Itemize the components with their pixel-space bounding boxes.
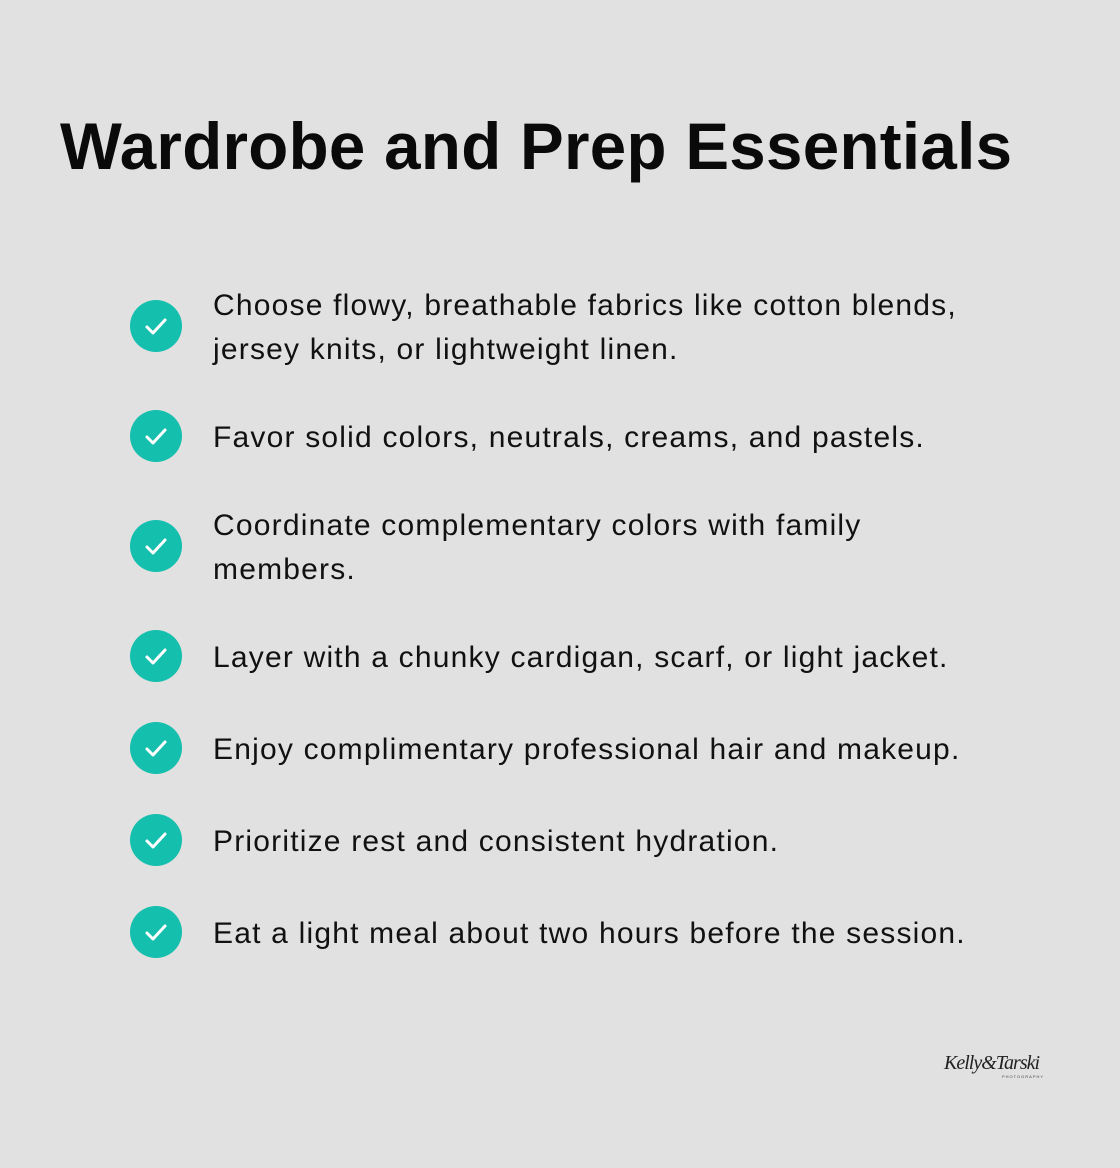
item 2 [130, 410, 925, 462]
item 3 [130, 509, 862, 586]
text: Layer with a chunky cardigan, scarf, or light jacket. [213, 641, 949, 674]
icon: check [130, 630, 182, 682]
text: Eat a light meal about two hours before the session. [213, 917, 966, 950]
icon: check [130, 906, 182, 958]
logo: signature: Kelly&Tarski [944, 1052, 1039, 1074]
text: Coordinate complementary colors with family members. [213, 509, 862, 586]
item 1 [130, 289, 957, 366]
text: Choose flowy, breathable fabrics like cotton blends, jersey knits, or lightweight linen. [213, 289, 957, 366]
icon: check [130, 410, 182, 462]
item 5 [130, 722, 960, 774]
icon: check [130, 722, 182, 774]
text: Enjoy complimentary professional hair and makeup. [213, 733, 960, 766]
item 7 [130, 906, 966, 958]
icon: check [130, 520, 182, 572]
icon: check [130, 300, 182, 352]
text: Favor solid colors, neutrals, creams, and pastels. [213, 421, 925, 454]
title: Wardrobe and Prep Essentials [60, 110, 1012, 183]
item 6 [130, 814, 779, 866]
icon: check [130, 814, 182, 866]
text: Prioritize rest and consistent hydration. [213, 825, 779, 858]
item 4 [130, 630, 949, 682]
logo: signature: PHOTOGRAPHY [1002, 1074, 1044, 1079]
